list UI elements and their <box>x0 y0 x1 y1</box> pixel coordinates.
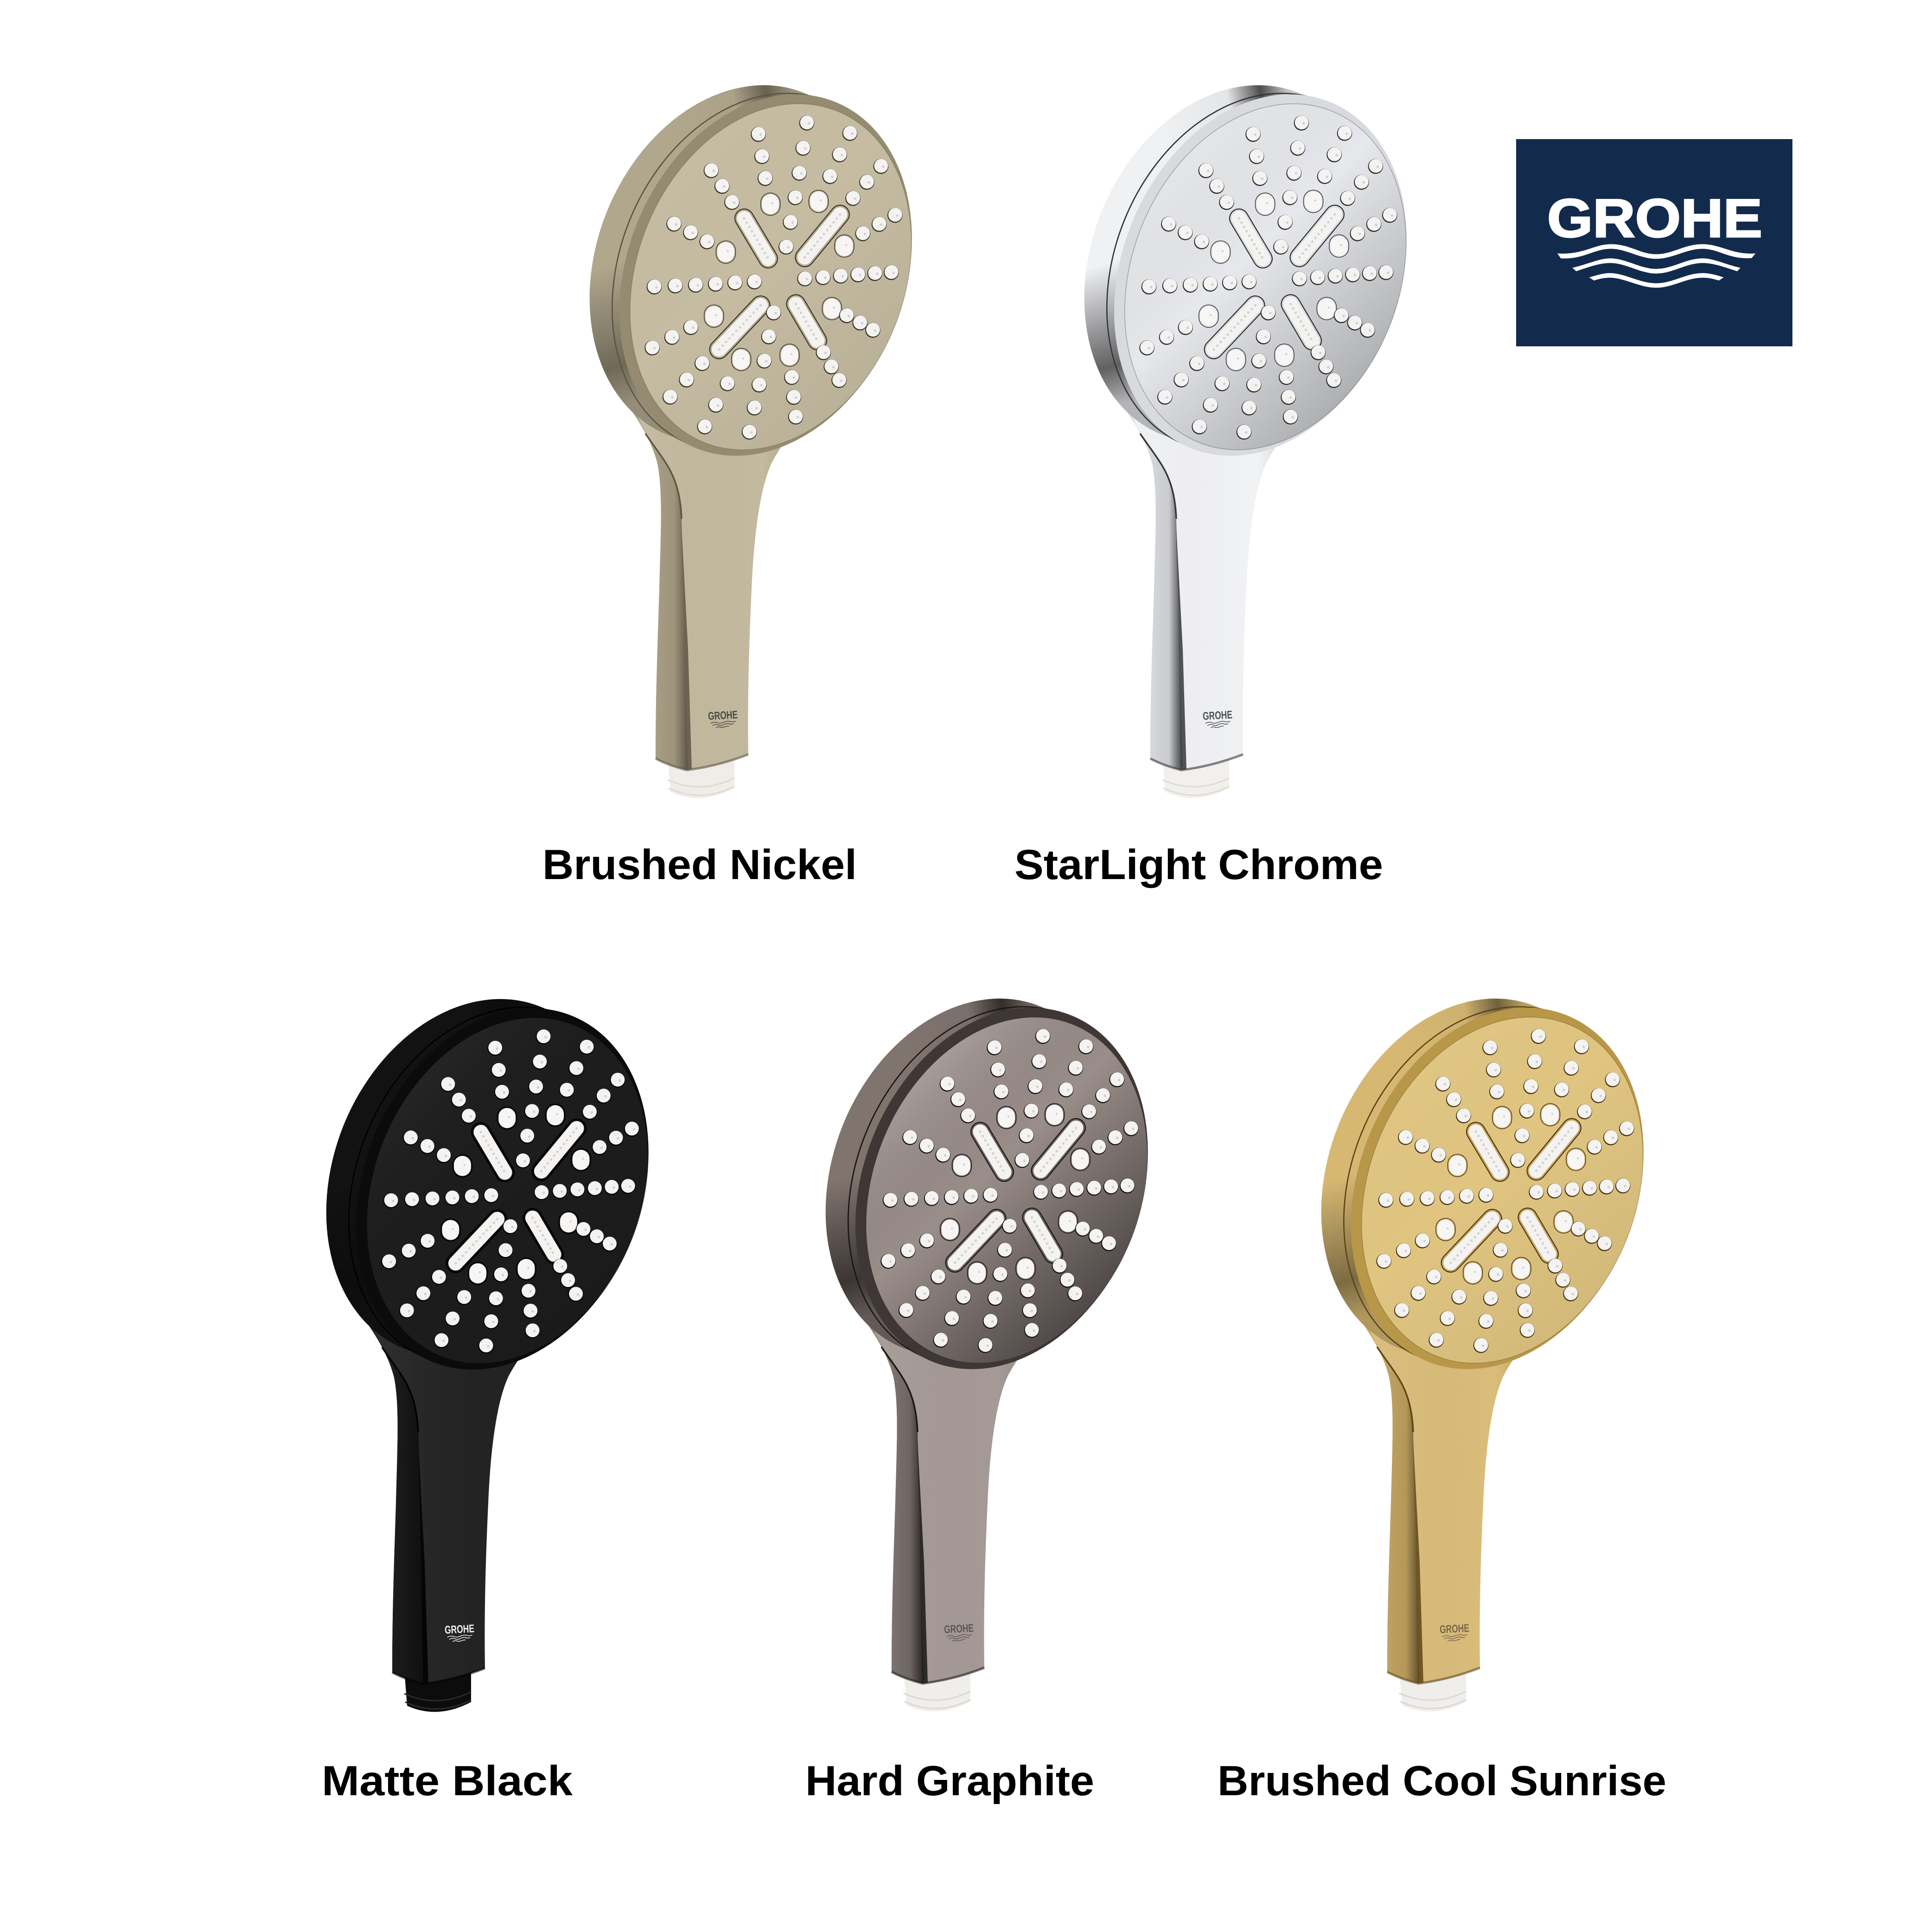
label: StarLight Chrome: StarLight Chrome <box>1014 842 1383 888</box>
logo: GROHE <box>1516 139 1792 346</box>
icon: StarLight Chrome hand shower <box>1033 41 1458 798</box>
icon: Hard Graphite hand shower <box>774 955 1199 1711</box>
icon: Brushed Cool Sunrise hand shower <box>1270 955 1695 1711</box>
label: Hard Graphite: Hard Graphite <box>805 1758 1094 1804</box>
label: Matte Black: Matte Black <box>322 1758 573 1804</box>
label: Brushed Cool Sunrise: Brushed Cool Sunrise <box>1218 1758 1666 1804</box>
icon: Brushed Nickel hand shower <box>538 41 963 798</box>
logo: GROHE: GROHE <box>1547 188 1762 249</box>
icon: Matte Black hand shower <box>275 955 700 1712</box>
label: Brushed Nickel: Brushed Nickel <box>542 842 857 888</box>
